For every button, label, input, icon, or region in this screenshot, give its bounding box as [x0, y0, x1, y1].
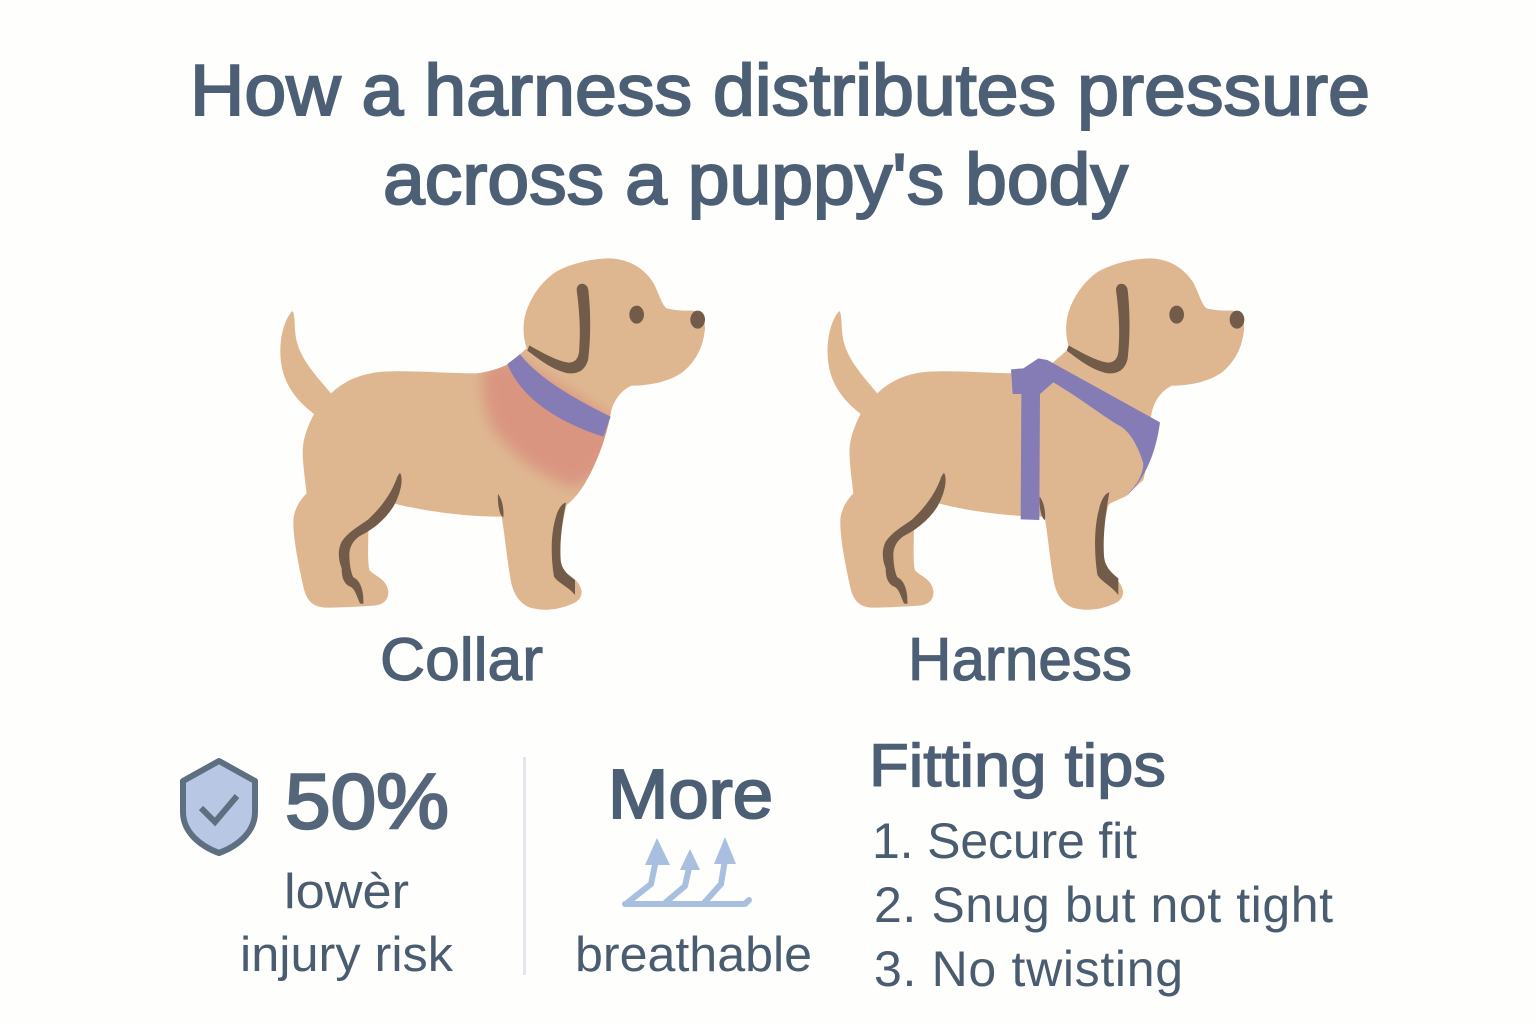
label: Collar: Collar [380, 626, 543, 693]
icon: airflow arrows [625, 837, 749, 904]
icon: shield with check [183, 761, 255, 853]
belly mark [1040, 497, 1045, 520]
divider [523, 757, 526, 975]
chest fill under the harness [1077, 400, 1157, 505]
illustration: puppy wearing a harness [828, 258, 1244, 610]
nose [690, 311, 705, 329]
stat caption: lower injury risk: lowèr [284, 865, 409, 919]
title: How a harness distributes pressure [190, 51, 1370, 131]
heading: fitting tips: Fitting tips [869, 732, 1166, 799]
front leg line [552, 503, 575, 595]
belly mark [498, 494, 503, 517]
stat: 50%: 50% [285, 757, 449, 845]
list: fitting tips: 3. No twisting [874, 941, 1183, 997]
hind leg line [883, 473, 946, 604]
label: Harness: Harness [908, 626, 1132, 693]
caption: breathable: breathable [575, 928, 812, 982]
puppy body [828, 258, 1244, 610]
list: fitting tips: 2. Snug but not tight [874, 877, 1333, 933]
list: fitting tips [872, 813, 1333, 997]
ear [1067, 284, 1130, 373]
stat caption: lower injury risk [240, 865, 454, 982]
eye [1169, 306, 1184, 324]
puppy body [280, 258, 705, 610]
title [190, 51, 1370, 220]
harness straps [1011, 358, 1160, 520]
title: across a puppy's body [383, 140, 1128, 220]
hind leg line [339, 473, 402, 604]
list: fitting tips: 1. Secure fit [872, 813, 1137, 869]
pressure area on neck and chest [482, 357, 627, 488]
illustration: puppy wearing a collar [280, 258, 705, 610]
stat: More: More [608, 755, 773, 833]
nose [1230, 311, 1244, 329]
ear [527, 284, 590, 373]
eye [629, 306, 644, 324]
stat caption: lower injury risk: injury risk [240, 928, 454, 982]
collar band [507, 354, 611, 437]
front leg line [1095, 492, 1118, 595]
